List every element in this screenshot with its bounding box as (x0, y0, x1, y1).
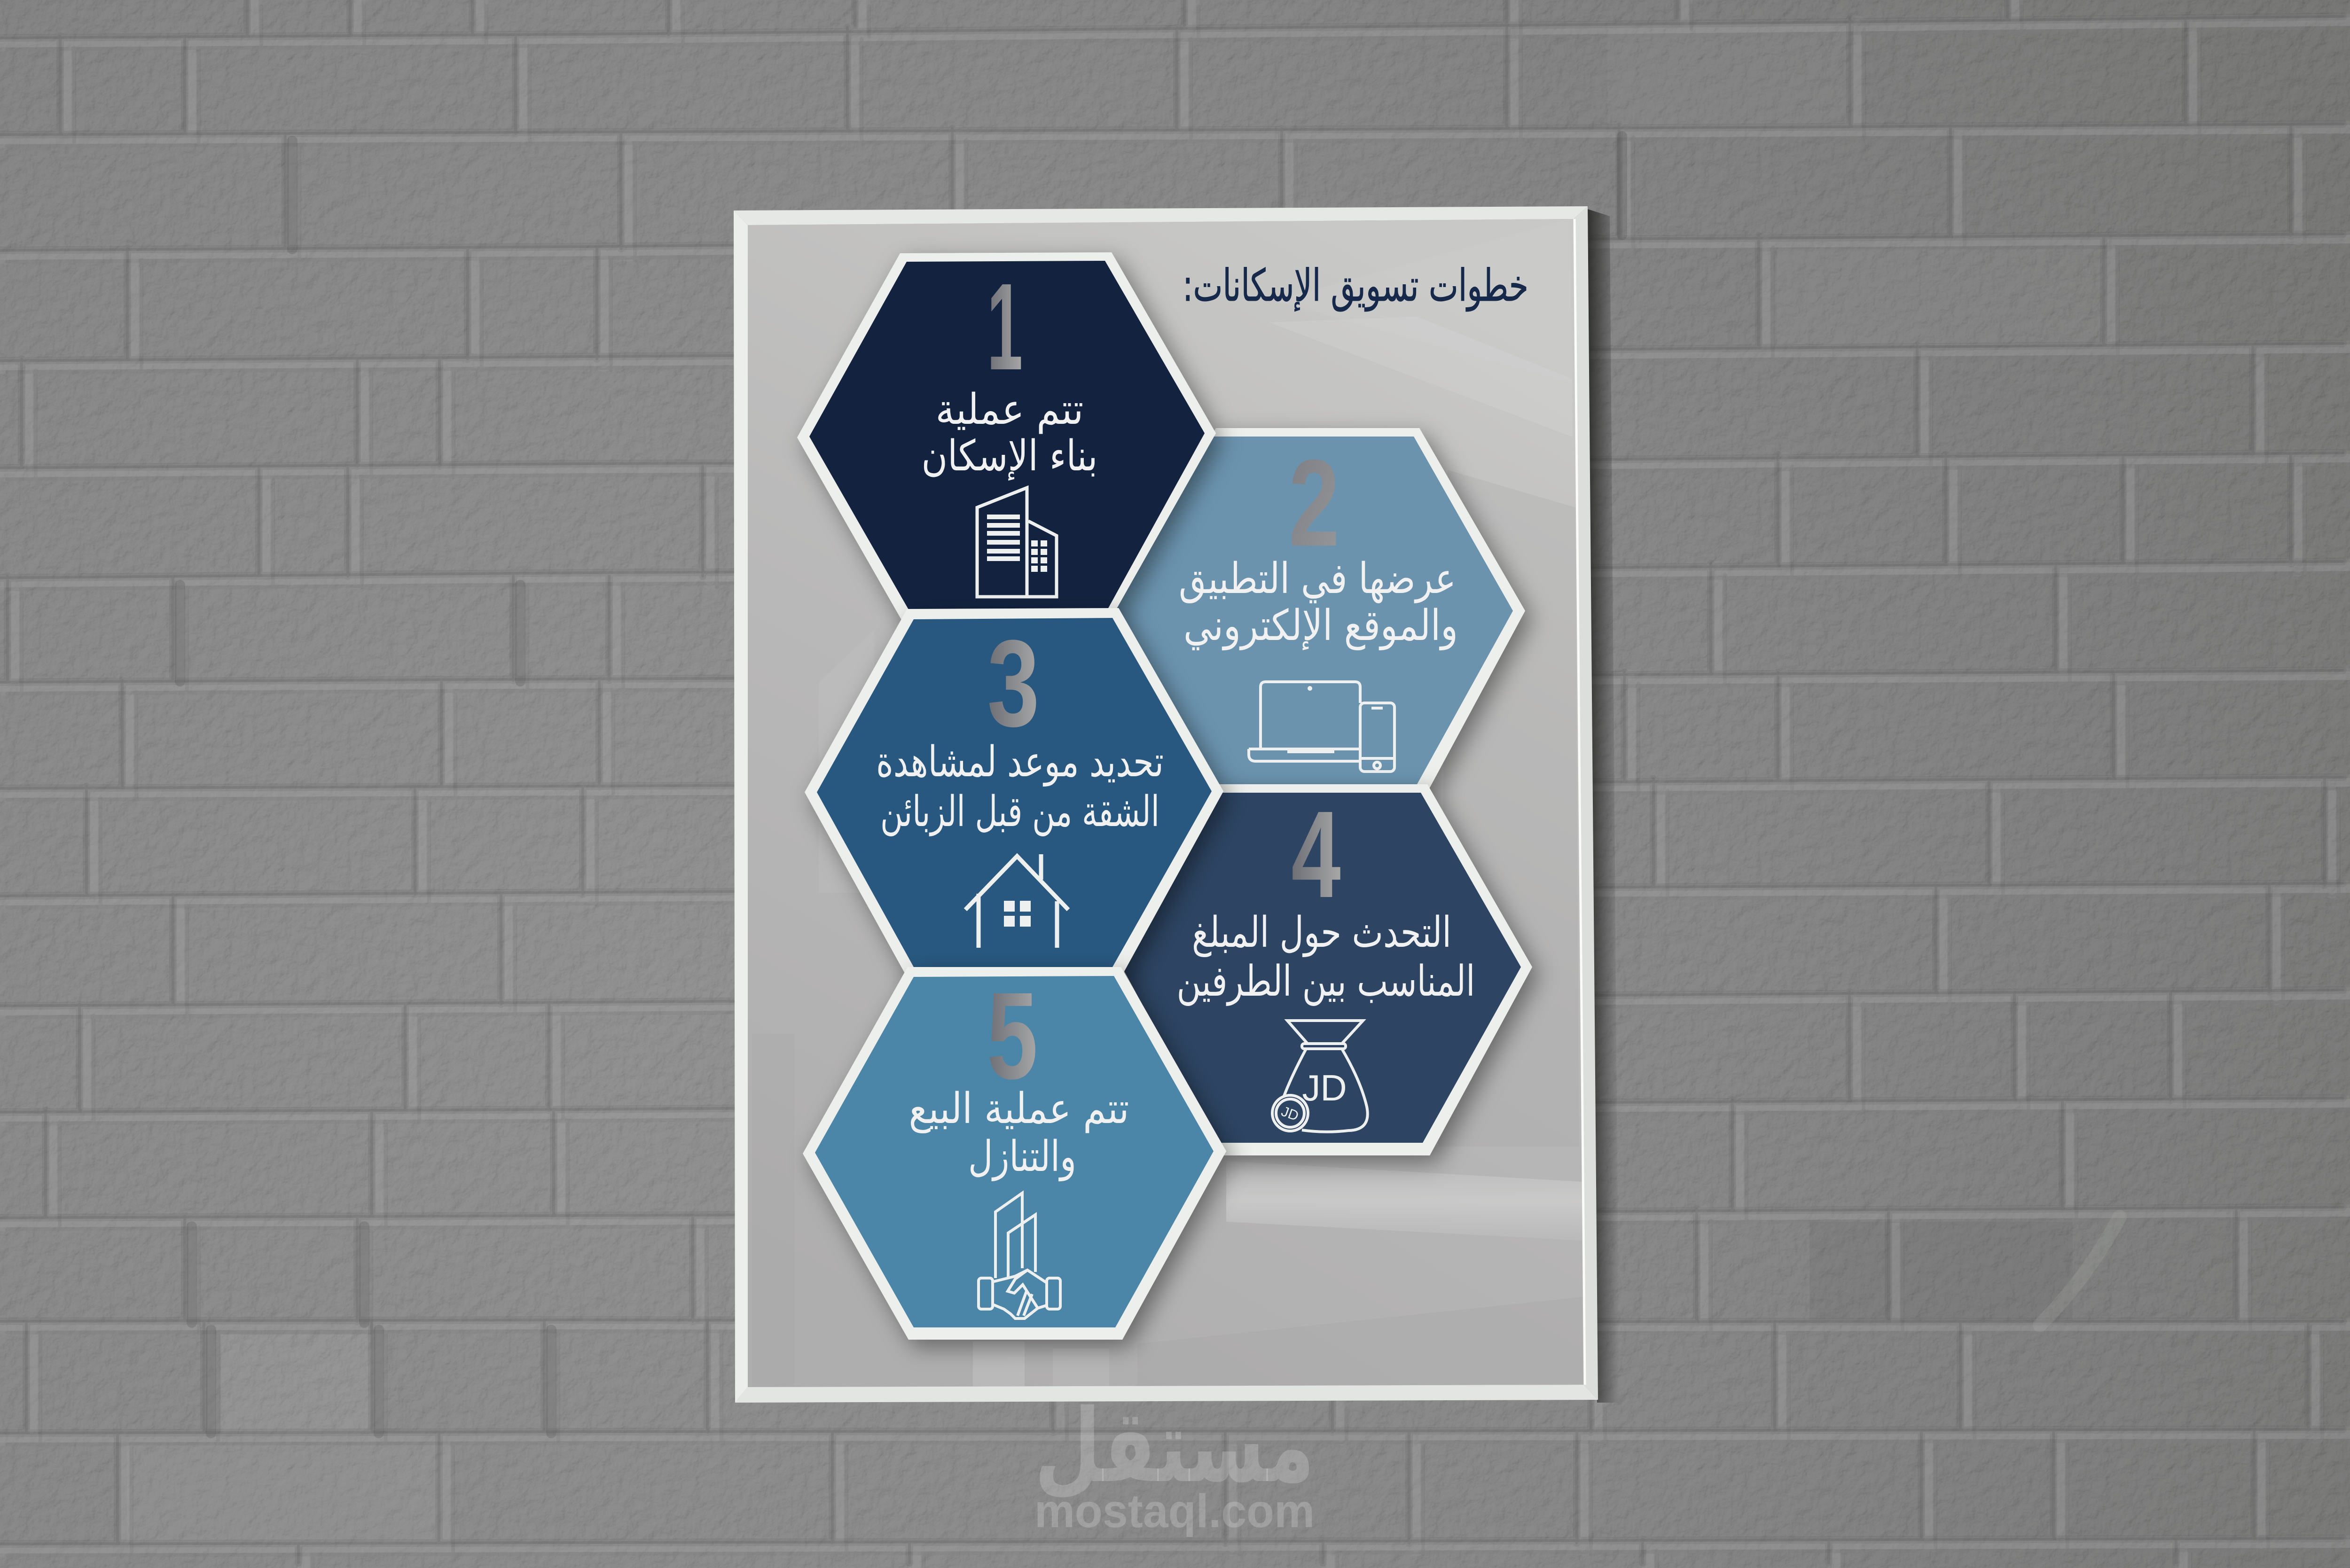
text: step 4 (1177, 908, 1475, 1006)
number 2: 2 (1289, 435, 1340, 572)
hexagon 5: sale and transfer (803, 967, 1226, 1340)
frame bottom rail (735, 1385, 1598, 1403)
text: step 2: عرضها في التطبيق (1179, 554, 1456, 603)
frame right rail (1574, 206, 1598, 1400)
text: step 3 (876, 737, 1164, 836)
frame top rail (734, 206, 1588, 225)
icon: buildings (977, 488, 1057, 597)
poster frame (734, 206, 1598, 1403)
panel: poster background (748, 219, 1584, 1387)
text: step 4: التحدث حول المبلغ (1192, 908, 1451, 957)
watermark: mostaql.com (1034, 1485, 1315, 1537)
watermark: مستقل (1034, 1387, 1315, 1505)
frame left rail (734, 211, 748, 1403)
number 4: 4 (1291, 785, 1341, 923)
text: step 1: تتم عملية (935, 385, 1084, 434)
text: step 2 (1179, 554, 1458, 651)
text: step 2: والموقع الإلكتروني (1183, 601, 1458, 651)
icon: laptop and phone (1249, 682, 1394, 772)
icon: towers and handshake (979, 1193, 1060, 1318)
watermark (1034, 1387, 1315, 1537)
text: step 5 (909, 1084, 1129, 1182)
text: step 5: تتم عملية البيع (909, 1084, 1129, 1133)
text: step 3: تحديد موعد لمشاهدة (876, 737, 1164, 787)
text: step 5: والتنازل (968, 1132, 1076, 1182)
hexagon 2: app and website (1108, 428, 1525, 789)
icon: money bag: JD (1302, 1067, 1347, 1108)
number 3: 3 (987, 615, 1040, 752)
hexagon 1: building (797, 252, 1216, 620)
text: step 1 (921, 385, 1098, 481)
title: خطوات تسويق الإسكانات: (1183, 260, 1528, 312)
text: step 4: المناسب بين الطرفين (1177, 957, 1475, 1006)
icon: money bag (1272, 1021, 1368, 1132)
hexagon 4: price talk (1114, 784, 1532, 1155)
frame shadow on wall (1588, 209, 1619, 1403)
text: step 1: بناء الإسكان (921, 431, 1098, 481)
icon: house (965, 854, 1068, 948)
hexagon 3: viewing appointment (805, 608, 1223, 977)
text: step 3: الشقة من قبل الزبائن (880, 787, 1159, 836)
number 1: 1 (987, 258, 1023, 396)
icon: money bag: JD (1279, 1104, 1300, 1124)
number 5: 5 (987, 967, 1038, 1105)
